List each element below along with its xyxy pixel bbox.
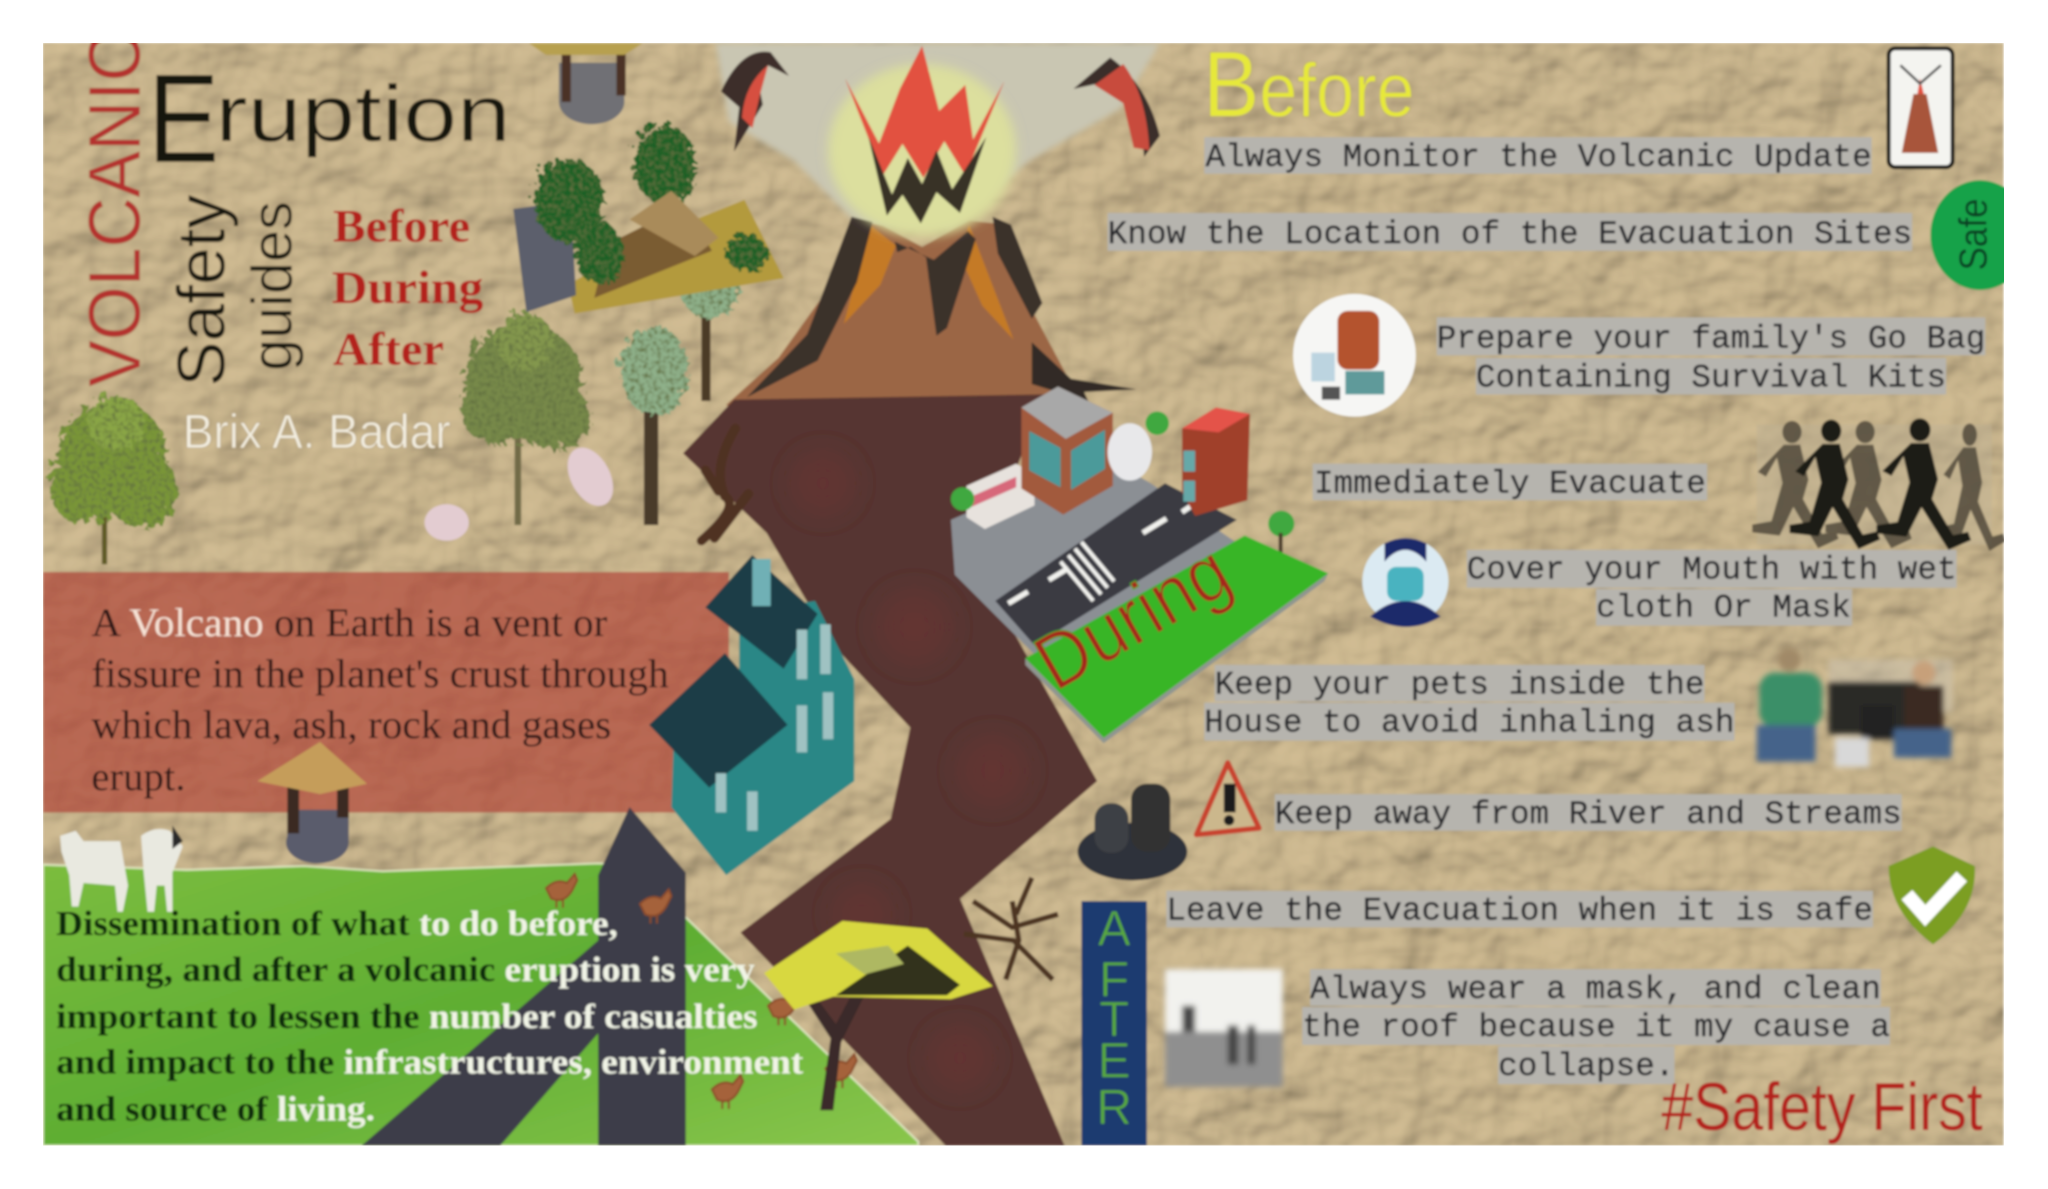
volcano cone <box>726 219 1084 413</box>
tip: mask and roof <box>1302 969 1890 1085</box>
after banner: F <box>1099 952 1129 1008</box>
title: eruption: E <box>148 47 219 189</box>
teal office <box>1021 387 1113 515</box>
iso garden island <box>513 120 784 313</box>
paragraph: dissemination: Dissemination of what to do before, <box>56 904 618 943</box>
tip: go bag <box>1437 317 1985 397</box>
dark road <box>362 807 686 1145</box>
paragraph: dissemination: and source of living. <box>56 1090 375 1129</box>
subtitle: before during after <box>332 201 484 375</box>
paragraph: volcano definition: A Volcano on Earth is a vent or <box>91 600 608 645</box>
photo: family with pets <box>1757 648 1953 767</box>
tip: pets: Keep your pets inside the <box>1215 667 1704 704</box>
volcano orange streaks <box>844 225 1014 340</box>
icon: safety shield <box>1889 846 1975 944</box>
tip: cover mouth: Cover your Mouth with wet <box>1467 552 1957 589</box>
after banner: R <box>1096 1080 1132 1136</box>
city platform <box>951 455 1236 660</box>
lava flow <box>683 394 1097 1145</box>
tree middle <box>456 308 585 525</box>
subtitle: before during after: After <box>333 323 444 375</box>
after banner: E <box>1098 1033 1131 1089</box>
teal house <box>649 555 854 875</box>
tip: monitor: Always Monitor the Volcanic Update <box>1206 139 1872 176</box>
dry tree <box>964 878 1058 980</box>
paragraph: volcano definition <box>91 600 669 799</box>
volcano <box>721 46 1160 413</box>
tip: evacuate: Immediately Evacuate <box>1314 465 1706 502</box>
tree left <box>44 389 174 564</box>
green hill <box>43 863 918 1145</box>
after banner: T <box>1099 991 1129 1047</box>
tip: go bag: Containing Survival Kits <box>1476 360 1946 397</box>
right lava bomb <box>1074 57 1160 157</box>
icon: safe badge: Safe <box>1953 199 1996 270</box>
street <box>995 483 1237 645</box>
dry log <box>701 428 748 541</box>
city block <box>951 387 1294 660</box>
author name: Brix A. Badar <box>183 405 451 459</box>
chickens <box>546 874 857 1109</box>
red tower <box>1182 408 1250 516</box>
title: eruption: ruption <box>216 69 511 158</box>
after banner <box>1081 901 1147 1145</box>
tip: mask and roof: Always wear a mask, and clean <box>1310 971 1881 1008</box>
title: eruption <box>148 47 511 189</box>
title: volcanic: VOLCANIC <box>75 31 156 387</box>
after banner: A <box>1098 901 1131 957</box>
volcano dark crater ridges <box>747 217 1042 397</box>
during label: During <box>1020 526 1245 707</box>
paragraph: dissemination: during, and after a volcanic eruption is very <box>56 950 755 989</box>
left lava bomb <box>721 52 789 152</box>
tip: go bag: Prepare your family's Go Bag <box>1437 320 1985 357</box>
road markings <box>1008 502 1198 603</box>
magma glow <box>828 64 1016 236</box>
tip: pets: House to avoid inhaling ash <box>1204 704 1735 741</box>
rock <box>1078 784 1187 880</box>
tip: cover mouth <box>1467 550 1957 627</box>
well top <box>529 43 643 124</box>
subtitle: before during after: During <box>332 262 484 314</box>
tip: pets <box>1204 665 1735 741</box>
lava glow spots <box>794 455 1024 1087</box>
shop <box>967 464 1034 529</box>
red information band <box>43 572 729 812</box>
subtitle: safety guides: Safety <box>165 195 240 387</box>
paragraph: volcano definition: fissure in the planet's crust through <box>91 651 669 696</box>
tip: cover mouth: cloth Or Mask <box>1596 590 1851 627</box>
acacia tree <box>764 921 993 1110</box>
pigs <box>424 440 622 541</box>
icon: warning triangle <box>1196 763 1259 835</box>
subtitle: safety guides <box>165 195 304 387</box>
heading: before: Before <box>1203 31 1415 136</box>
tip: location: Know the Location of the Evacuation Sites <box>1108 216 1912 253</box>
photo: collapsed roof <box>1165 969 1283 1087</box>
icon: go bag <box>1293 294 1416 417</box>
tip: mask and roof: collapse. <box>1498 1048 1674 1085</box>
dark flame <box>869 137 986 223</box>
ash cloud <box>716 43 1160 226</box>
subtitle: safety guides: guides <box>240 201 304 371</box>
white dome <box>1108 423 1152 481</box>
during block <box>1020 526 1328 743</box>
icon: running people <box>1752 418 2005 551</box>
right volcano ridge <box>1030 342 1136 402</box>
hashtag: safety first: #Safety First <box>1661 1070 1983 1145</box>
well middle <box>257 742 367 863</box>
tip: leave evacuation: Leave the Evacuation when it is safe <box>1166 893 1873 930</box>
red flame <box>845 46 1004 178</box>
icon: phone with volcano <box>1889 48 1953 167</box>
paragraph: volcano definition: which lava, ash, rock and gases <box>91 702 611 747</box>
icon: safe badge <box>1930 180 2030 290</box>
paragraph: dissemination: important to lessen the number of casualties <box>56 997 758 1036</box>
tip: river: Keep away from River and Streams <box>1275 796 1902 833</box>
paragraph: volcano definition: erupt. <box>91 754 185 799</box>
tip: mask and roof: the roof because it my cause a <box>1302 1009 1890 1046</box>
small trees <box>951 411 1294 537</box>
icon: face mask <box>1362 538 1448 627</box>
subtitle: before during after: Before <box>333 201 470 253</box>
palm trees <box>615 235 735 525</box>
goats <box>60 825 183 912</box>
paragraph: dissemination <box>56 904 804 1129</box>
paragraph: dissemination: and impact to the infrastructures, environment <box>56 1043 804 1082</box>
